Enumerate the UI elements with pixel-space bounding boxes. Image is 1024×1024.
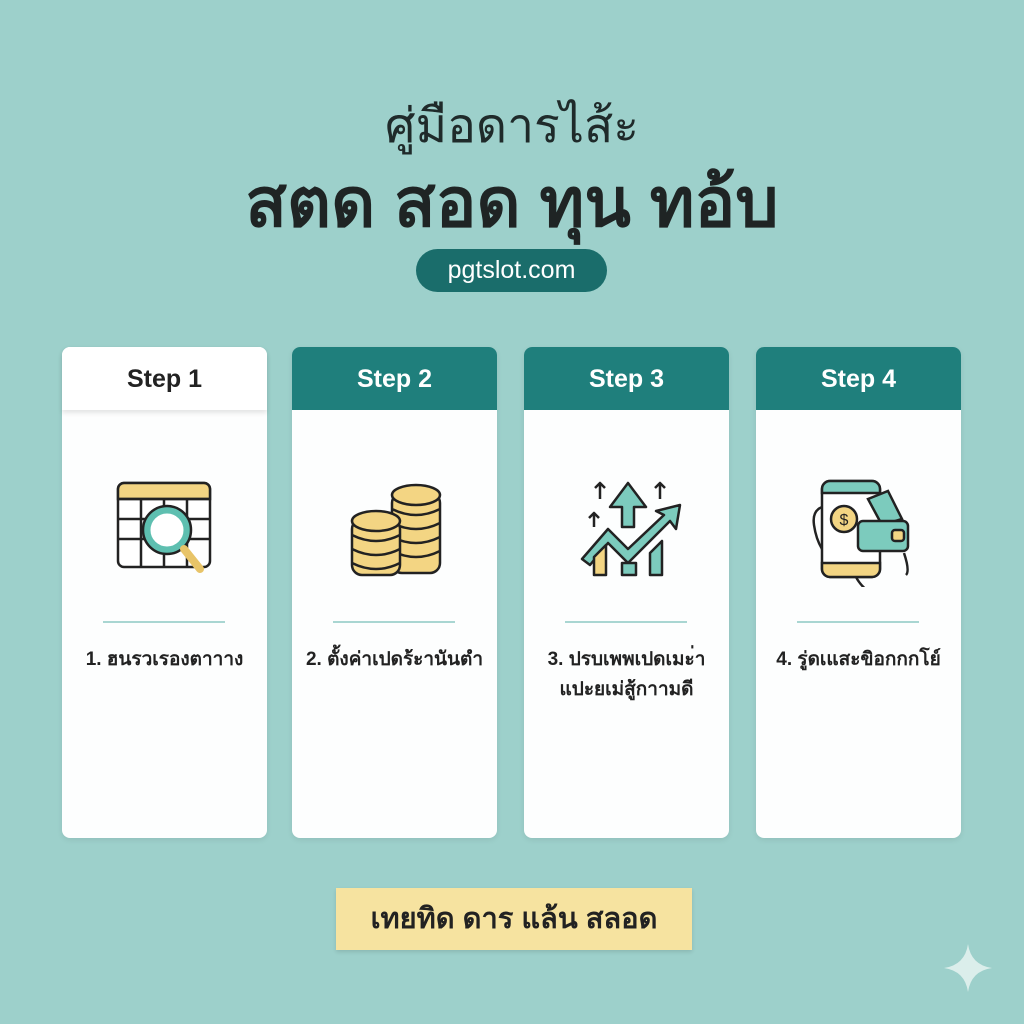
step 3 text: แปะยเม่สู้กาามดี — [560, 679, 693, 700]
url pill: pgtslot.com — [448, 256, 575, 284]
step 1 text: 1. ฮนรวเรองตาาาง — [86, 649, 243, 670]
title line 2: สตด สอด ทุน ทอ้บ — [245, 165, 779, 241]
icon: calendar search — [116, 482, 212, 573]
icon: phone wallet — [812, 480, 910, 587]
step 2 header: Step 2 — [357, 365, 432, 393]
icon: sparkle — [944, 944, 992, 992]
step 2 text: 2. ตั้งค่าเปดร้ะานันตำ — [306, 649, 483, 670]
bottom banner — [336, 888, 692, 950]
bottom banner: เทยทิด ดาร แล้น สลอด — [371, 903, 657, 935]
url pill — [416, 249, 607, 292]
step 3 header — [524, 347, 729, 410]
panel: step 4 — [756, 347, 961, 838]
icon: coins — [350, 484, 442, 576]
step 3 text: 3. ปรบเพพเปดเมะ่า — [548, 649, 705, 670]
icon: growth chart — [580, 482, 682, 576]
panel: step 3 — [524, 347, 729, 838]
step 2 header — [292, 347, 497, 410]
step 4 header: Step 4 — [821, 365, 896, 393]
title line 1: ศู่มือดารไส้ะ — [385, 100, 639, 153]
panel: step 1 — [62, 347, 267, 838]
step 1 header: Step 1 — [127, 365, 202, 393]
panel: step 2 — [292, 347, 497, 838]
step 4 header — [756, 347, 961, 410]
step 4 text: 4. รู่ดเแสะขิอกกกโย์ — [776, 649, 941, 670]
icon: phone wallet: $ — [840, 512, 849, 529]
step 3 header: Step 3 — [589, 365, 664, 393]
step 1 header — [62, 347, 267, 410]
step 3 text — [548, 645, 705, 700]
